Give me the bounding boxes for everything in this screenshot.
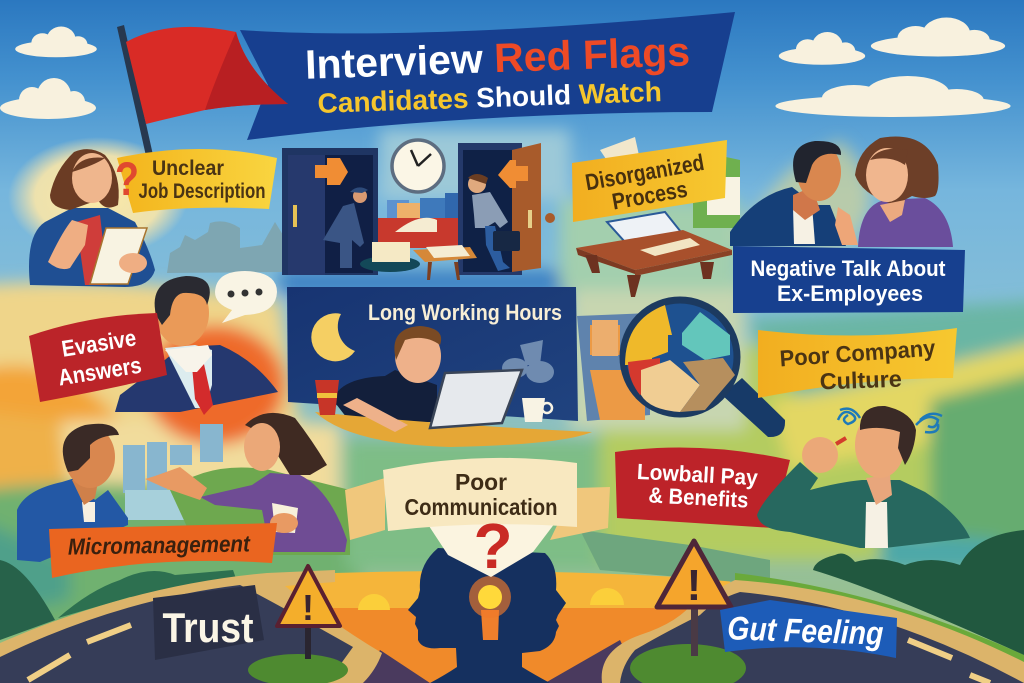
question mark icon: ?	[115, 152, 139, 205]
buildings and sofa	[378, 193, 459, 248]
panel: poor communication	[345, 458, 610, 582]
person leaving left	[323, 187, 368, 268]
panel: office doors with clock	[282, 140, 555, 280]
trees right	[813, 530, 1024, 655]
panel: puzzle and magnifying glass	[577, 300, 957, 437]
label	[29, 313, 167, 402]
panel: lowball pay and benefits: Lowball Pay	[636, 459, 759, 490]
label	[117, 149, 277, 213]
icon: clock	[392, 140, 444, 192]
right grass strip	[735, 573, 1024, 672]
panel: unclear job description: Job Description	[138, 180, 266, 203]
panel: evasive answers: Evasive	[60, 324, 138, 362]
panel: puzzle and magnifying glass: Culture	[819, 366, 902, 394]
worried man	[757, 406, 970, 548]
pointing hand	[835, 207, 858, 245]
person at laptop	[333, 326, 441, 422]
panel: micromanagement: Micromanagement	[68, 530, 251, 560]
panel: disorganized process: Disorganized	[583, 149, 706, 195]
keyboard	[607, 212, 681, 242]
title banner	[240, 12, 735, 140]
side ribbons	[345, 478, 610, 540]
panel: unclear job description: Unclear	[152, 157, 224, 180]
label	[572, 140, 727, 222]
trees left	[0, 560, 240, 640]
trust label	[153, 585, 264, 660]
icon: right arrow	[498, 160, 528, 188]
icon: question mark: ?	[473, 510, 513, 582]
speech bubble with dots	[215, 271, 277, 323]
icon: left warning sign	[277, 566, 340, 659]
panel: disorganized process: Process	[610, 176, 689, 215]
panel: poor communication: Poor	[455, 469, 507, 495]
gut feeling label: Gut Feeling	[727, 609, 884, 652]
hill behind woman	[170, 468, 350, 555]
clouds	[0, 17, 1011, 119]
panel: negative talk about ex-employees	[730, 137, 965, 313]
panel: negative talk about ex-employees: Ex-Employees	[777, 281, 923, 306]
arm	[343, 398, 408, 432]
trust label: Trust	[162, 604, 254, 651]
panel: poor communication: Communication	[404, 494, 558, 520]
woman with clipboard	[29, 149, 155, 287]
heading: Long Working Hours	[368, 300, 562, 325]
panel: micromanagement	[17, 413, 350, 578]
panel: evasive answers	[29, 271, 278, 415]
label	[383, 458, 577, 531]
title line 1: Interview Red Flags	[304, 28, 691, 88]
panel: negative talk about ex-employees: Negative Talk About	[750, 256, 946, 281]
icon: swirl lines	[838, 409, 942, 432]
right road	[602, 580, 1024, 683]
shrubs on road islands	[248, 644, 746, 683]
road with head silhouettes	[0, 530, 1024, 683]
sun glow	[469, 576, 511, 618]
gut feeling label	[720, 600, 897, 658]
icon: left arrow	[315, 158, 348, 185]
laptop	[430, 370, 522, 428]
person running right	[468, 174, 520, 271]
title line 2: Candidates Should Watch	[317, 76, 662, 119]
woman pointing	[145, 413, 347, 552]
label	[733, 246, 965, 313]
buildings	[123, 424, 223, 520]
icon: red flag	[117, 25, 288, 156]
icon: coffee cup left	[315, 380, 339, 415]
icon: coffee cup right	[522, 398, 552, 422]
man in suit	[115, 276, 278, 415]
panel: evasive answers: Answers	[56, 352, 143, 391]
man	[730, 141, 846, 246]
man	[17, 424, 128, 562]
magnifier	[623, 300, 785, 437]
icon: right warning sign: !	[687, 561, 701, 610]
silhouettes	[408, 548, 566, 683]
desk	[315, 412, 592, 447]
icon: fan	[502, 340, 554, 383]
desk	[576, 230, 732, 270]
panel: puzzle and magnifying glass: Poor Company	[779, 335, 936, 371]
label	[49, 523, 277, 578]
desk with papers	[360, 242, 477, 280]
white speech wedge	[427, 523, 555, 577]
panel: lowball pay and benefits: & Benefits	[648, 482, 749, 513]
sunset band	[283, 530, 770, 683]
woman	[855, 137, 953, 247]
panel: lowball pay and benefits	[615, 406, 970, 548]
label	[615, 448, 790, 528]
panel: long working hours	[287, 287, 592, 447]
icon: moon	[311, 313, 355, 361]
left road	[0, 570, 382, 683]
panel: unclear job description	[29, 149, 277, 287]
label	[758, 328, 957, 398]
icon: left warning sign: !	[302, 587, 314, 628]
icon: right warning sign	[657, 541, 731, 656]
panel: disorganized process	[572, 137, 740, 297]
